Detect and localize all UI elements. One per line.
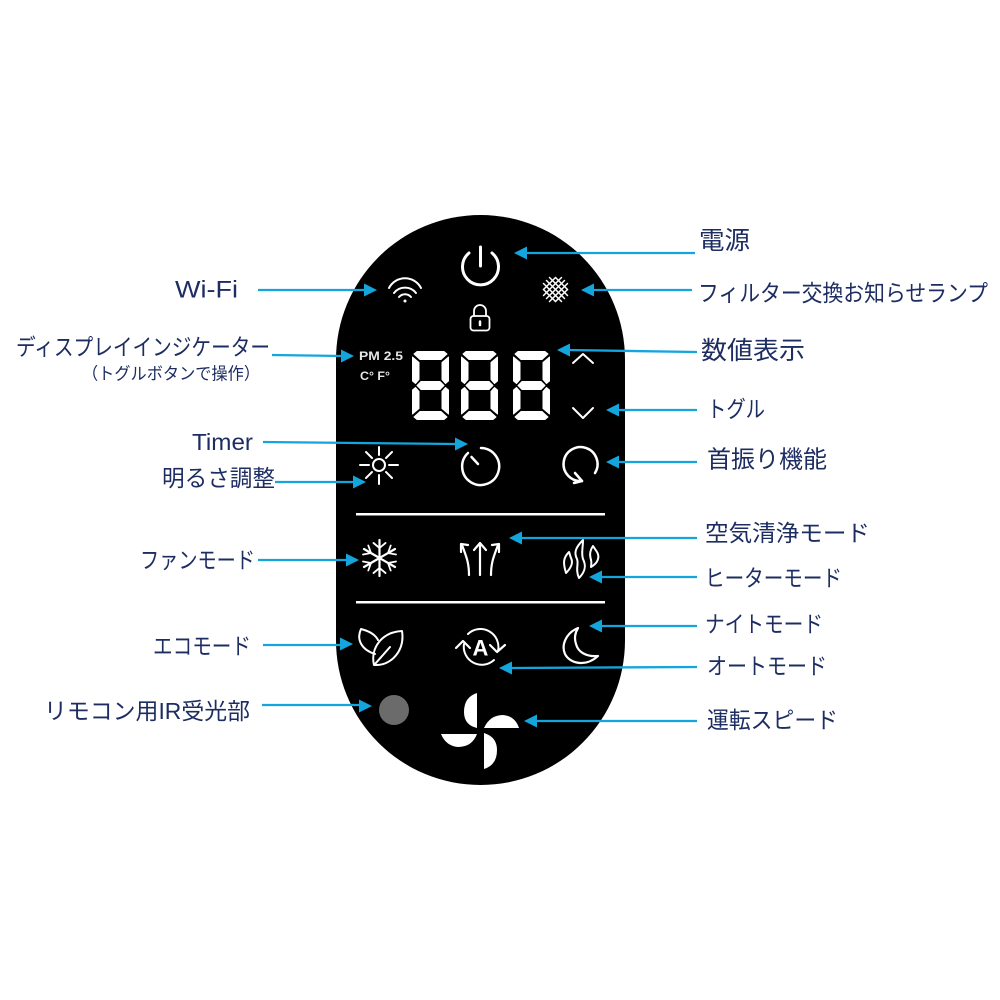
- label: display indicator note: （トグルボタンで操作）: [82, 364, 260, 384]
- arrow: power: [514, 246, 695, 260]
- arrow: brightness: [275, 476, 366, 488]
- icon: lock: [470, 305, 490, 330]
- icon: down chevron: [573, 408, 593, 418]
- label: fan mode: ファンモード: [140, 547, 255, 573]
- label: brightness: 明るさ調整: [162, 465, 275, 491]
- label: eco mode: エコモード: [153, 633, 251, 659]
- label: wifi: Wi-Fi: [175, 276, 238, 304]
- arrow: air purifier: [509, 532, 697, 544]
- icon: air purifier arrows: [461, 543, 499, 575]
- label: timer: Timer: [192, 429, 253, 455]
- display: digit 1: [412, 352, 448, 420]
- icon: up chevron: [573, 354, 593, 363]
- icon: power: [462, 247, 499, 285]
- label: IR receiver: リモコン用IR受光部: [44, 698, 250, 724]
- arrow: heater: [589, 570, 697, 584]
- arrow: night: [589, 620, 697, 632]
- arrow: numeric display: [557, 344, 697, 356]
- arrow: display indicator: [272, 350, 354, 362]
- label: numeric display: 数値表示: [701, 337, 805, 365]
- label: fan speed: 運転スピード: [707, 707, 838, 733]
- label: night mode: ナイトモード: [705, 611, 823, 637]
- icon: night moon: [564, 628, 598, 663]
- divider: upper: [356, 513, 605, 516]
- text: temperature units: C° F°: [360, 369, 390, 383]
- arrow: wifi: [258, 284, 377, 296]
- arrow: swing: [606, 456, 697, 468]
- text: PM 2.5: PM 2.5: [359, 349, 403, 363]
- icon: filter mesh: [544, 278, 568, 302]
- icon: IR receiver: [379, 695, 409, 725]
- icon: fan speed: [441, 693, 519, 769]
- label: auto mode: オートモード: [707, 653, 827, 679]
- label: power: 電源: [699, 227, 750, 255]
- icon: wifi: [389, 278, 421, 302]
- display: digit 2: [462, 352, 498, 420]
- icon: eco leaves: [359, 629, 402, 665]
- arrow: eco: [263, 638, 353, 650]
- icon: swing: [564, 447, 598, 483]
- arrow: timer: [263, 438, 468, 450]
- icon: auto mode: A: [473, 636, 489, 660]
- arrow: toggle: [606, 404, 697, 416]
- arrow: IR receiver: [262, 700, 372, 712]
- icon: heater flames: [564, 540, 598, 578]
- label: swing: 首振り機能: [707, 446, 827, 474]
- icon: fan mode snowflake: [363, 540, 396, 576]
- display: digit 3: [514, 352, 550, 420]
- label: toggle: トグル: [707, 396, 765, 422]
- arrow: fan mode: [258, 554, 359, 566]
- arrow: filter: [581, 284, 692, 296]
- label: display indicator: ディスプレイインジケーター: [16, 334, 270, 360]
- icon: timer: [462, 448, 499, 485]
- arrow: fan speed: [524, 714, 697, 728]
- arrow: auto: [499, 662, 697, 674]
- label: air purifier mode: 空気清浄モード: [705, 520, 870, 546]
- icon: brightness: [360, 447, 398, 484]
- icon: auto mode: [456, 629, 505, 665]
- divider: lower: [356, 601, 605, 604]
- label: heater mode: ヒーターモード: [705, 565, 842, 591]
- panel: control panel: [336, 215, 625, 785]
